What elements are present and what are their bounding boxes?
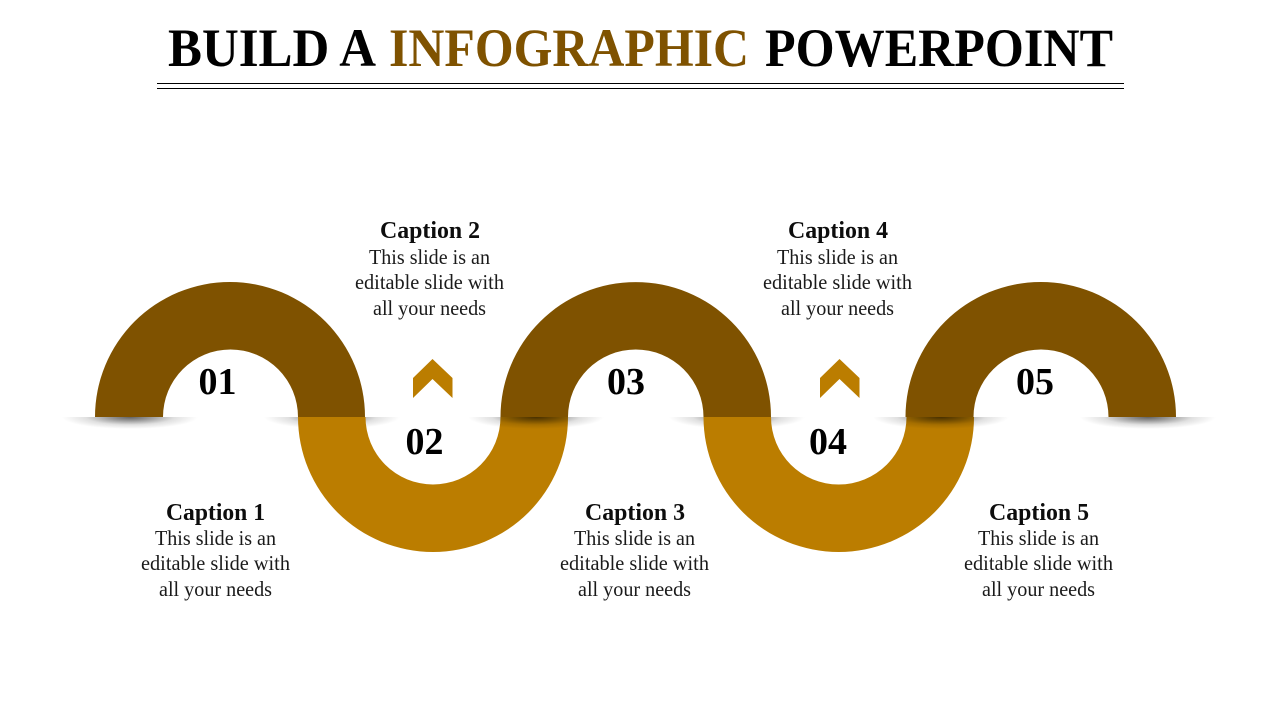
caption 1 <box>141 500 290 601</box>
arc 2 lower gold <box>298 417 568 552</box>
caption 4: Caption 4 <box>788 218 888 244</box>
caption 3 <box>560 500 709 601</box>
caption 2: This slide is an <box>369 245 490 269</box>
title: INFOGRAPHIC <box>389 18 749 78</box>
caption 5: editable slide with <box>964 551 1113 575</box>
caption 4: editable slide with <box>763 270 912 294</box>
arc 5 upper brown <box>906 282 1176 417</box>
caption 5: all your needs <box>982 577 1095 601</box>
caption 3: This slide is an <box>574 526 695 550</box>
caption 3: editable slide with <box>560 551 709 575</box>
caption 1: editable slide with <box>141 551 290 575</box>
arc 3 upper brown <box>500 282 771 417</box>
caption 1: all your needs <box>159 577 272 601</box>
number 03: 03 <box>607 361 645 403</box>
title underline <box>157 84 1124 88</box>
shadow: arc 1 left foot <box>62 417 198 429</box>
caption 3: Caption 3 <box>585 500 685 526</box>
caption 5: This slide is an <box>978 526 1099 550</box>
caption 1: This slide is an <box>155 526 276 550</box>
title: POWERPOINT <box>765 18 1113 78</box>
arc 1 upper brown <box>95 282 365 417</box>
caption 2: Caption 2 <box>380 218 480 244</box>
number 02: 02 <box>406 421 444 463</box>
icon: chevron up left <box>413 359 452 398</box>
caption 2: all your needs <box>373 296 486 320</box>
shadow: arc 3 left foot <box>468 417 604 429</box>
caption 4 <box>763 218 912 320</box>
caption 2 <box>355 218 504 320</box>
caption 4: This slide is an <box>777 245 898 269</box>
number 01: 01 <box>198 361 236 403</box>
number 04: 04 <box>809 421 847 463</box>
shadow: arc 3 right foot <box>669 417 805 429</box>
title <box>168 18 1113 78</box>
caption 3: all your needs <box>578 577 691 601</box>
caption 1: Caption 1 <box>166 500 265 526</box>
title: BUILD A <box>168 18 376 78</box>
caption 4: all your needs <box>781 296 894 320</box>
arc 4 lower gold <box>704 417 974 552</box>
caption 5: Caption 5 <box>989 500 1089 526</box>
caption 2: editable slide with <box>355 270 504 294</box>
shadow: arc 1 right foot <box>264 417 400 429</box>
number 05: 05 <box>1016 361 1054 403</box>
icon: chevron up right <box>820 359 860 398</box>
shadow: arc 5 left foot <box>873 417 1009 429</box>
caption 5 <box>964 500 1113 601</box>
shadow: arc 5 right foot <box>1080 417 1216 429</box>
